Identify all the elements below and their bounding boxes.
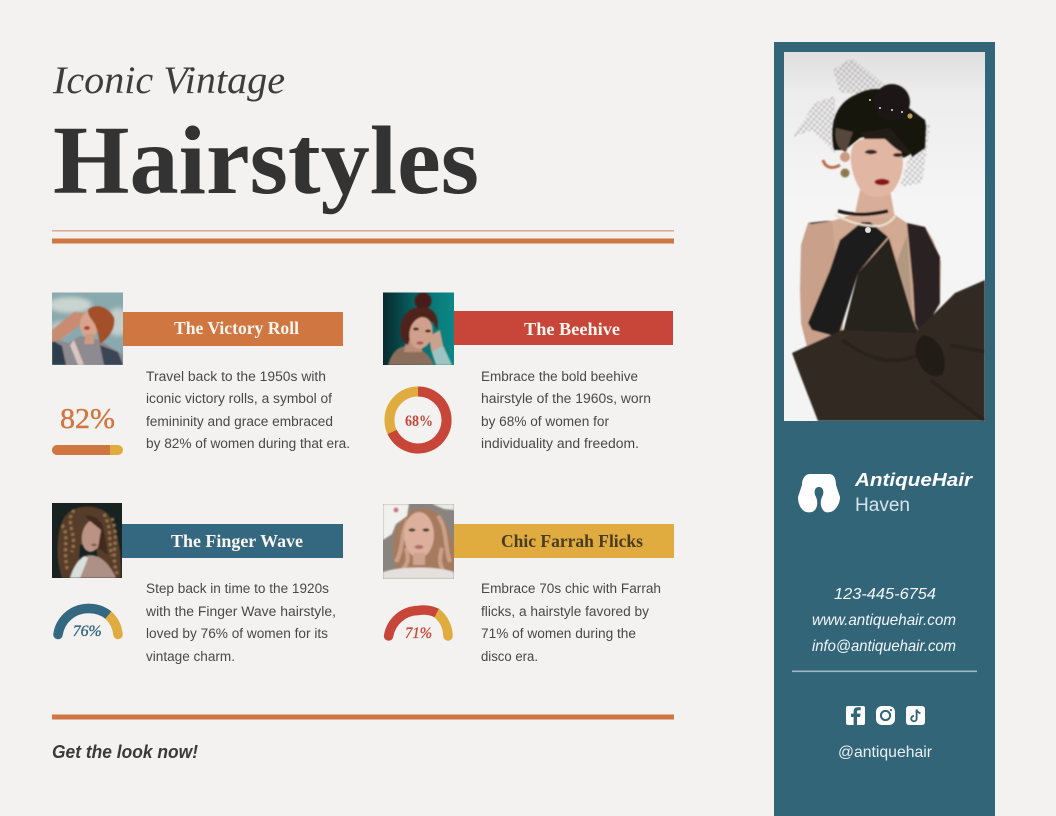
face [851,137,903,197]
description: Step back in time to the 1920s [146,581,329,596]
description: loved by 76% of women for its [146,626,328,641]
description [146,369,350,451]
skin: arm and chest [800,215,941,347]
description: with the Finger Wave hairstyle, [145,604,336,619]
description: vintage charm. [146,649,235,664]
icon: facebook [846,706,865,725]
gauge chart: 76%: 76% [73,623,102,640]
icon: tiktok [906,706,925,725]
veil [793,58,930,187]
photo: vintage model in black dress [784,52,985,421]
description: hairstyle of the 1960s, worn [481,391,651,406]
hat pearls and brooch [865,99,913,233]
description: by 68% of women for [481,414,609,429]
description [481,581,661,664]
photo: finger wave model [52,503,122,578]
call to action: Get the look now! [52,741,198,762]
banner [454,524,674,558]
bow [792,280,985,421]
social handle: @antiquehair [838,744,933,761]
progress bar [52,445,123,455]
neck [854,190,895,218]
contact details: info@antiquehair.com [812,638,956,655]
logo [798,469,974,516]
description [481,369,651,451]
banner title: The Beehive [524,319,620,339]
description: iconic victory rolls, a symbol of [146,391,332,406]
description [145,581,336,664]
brand name second line: Haven [855,495,910,516]
panel: The Beehive [383,292,673,451]
panel: The Finger Wave [52,503,343,664]
description: femininity and grace embraced [146,414,333,429]
hair and hat [832,89,925,158]
description: Travel back to the 1950s with [146,369,326,384]
description: Embrace the bold beehive [481,369,638,384]
banner [123,312,343,346]
description: individuality and freedom. [481,436,639,451]
photo: farrah flicks model [383,504,455,579]
brand name: AntiqueHair [854,469,974,490]
description: Embrace 70s chic with Farrah [481,581,661,596]
title [52,59,479,214]
banner [122,524,343,558]
donut chart: 68% [390,391,447,448]
donut chart: 68%: 68% [405,413,433,430]
photo: beehive model [383,292,454,365]
description: disco era. [481,649,538,664]
dress [808,221,940,337]
ear and earring [840,152,850,162]
photo: victory roll model [52,292,123,365]
gauge chart: 71%: 71% [405,625,432,642]
banner title: Chic Farrah Flicks [501,531,643,551]
banner title: The Finger Wave [171,531,303,551]
contact details [812,586,956,655]
panel: The Victory Roll [48,292,350,455]
panel: Chic Farrah Flicks [383,504,674,664]
description: 71% of women during the [481,626,636,641]
sidebar panel [774,42,995,816]
gauge chart: 71% [389,610,448,642]
banner title: The Victory Roll [174,318,299,338]
icon: hair silhouette [798,474,840,512]
contact details: 123-445-6754 [834,586,936,603]
description: by 82% of women during that era. [146,436,350,451]
necklaces [838,211,888,214]
icon: instagram [876,706,895,725]
description: flicks, a hairstyle favored by [481,604,649,619]
banner [454,311,673,345]
stat: 82%: 82% [60,403,115,435]
glove [808,222,888,337]
subtitle: Iconic Vintage: Iconic Vintage [52,59,285,102]
gauge chart: 76% [58,608,118,640]
heading: Hairstyles: Hairstyles [53,107,479,214]
contact details: www.antiquehair.com [812,612,956,629]
